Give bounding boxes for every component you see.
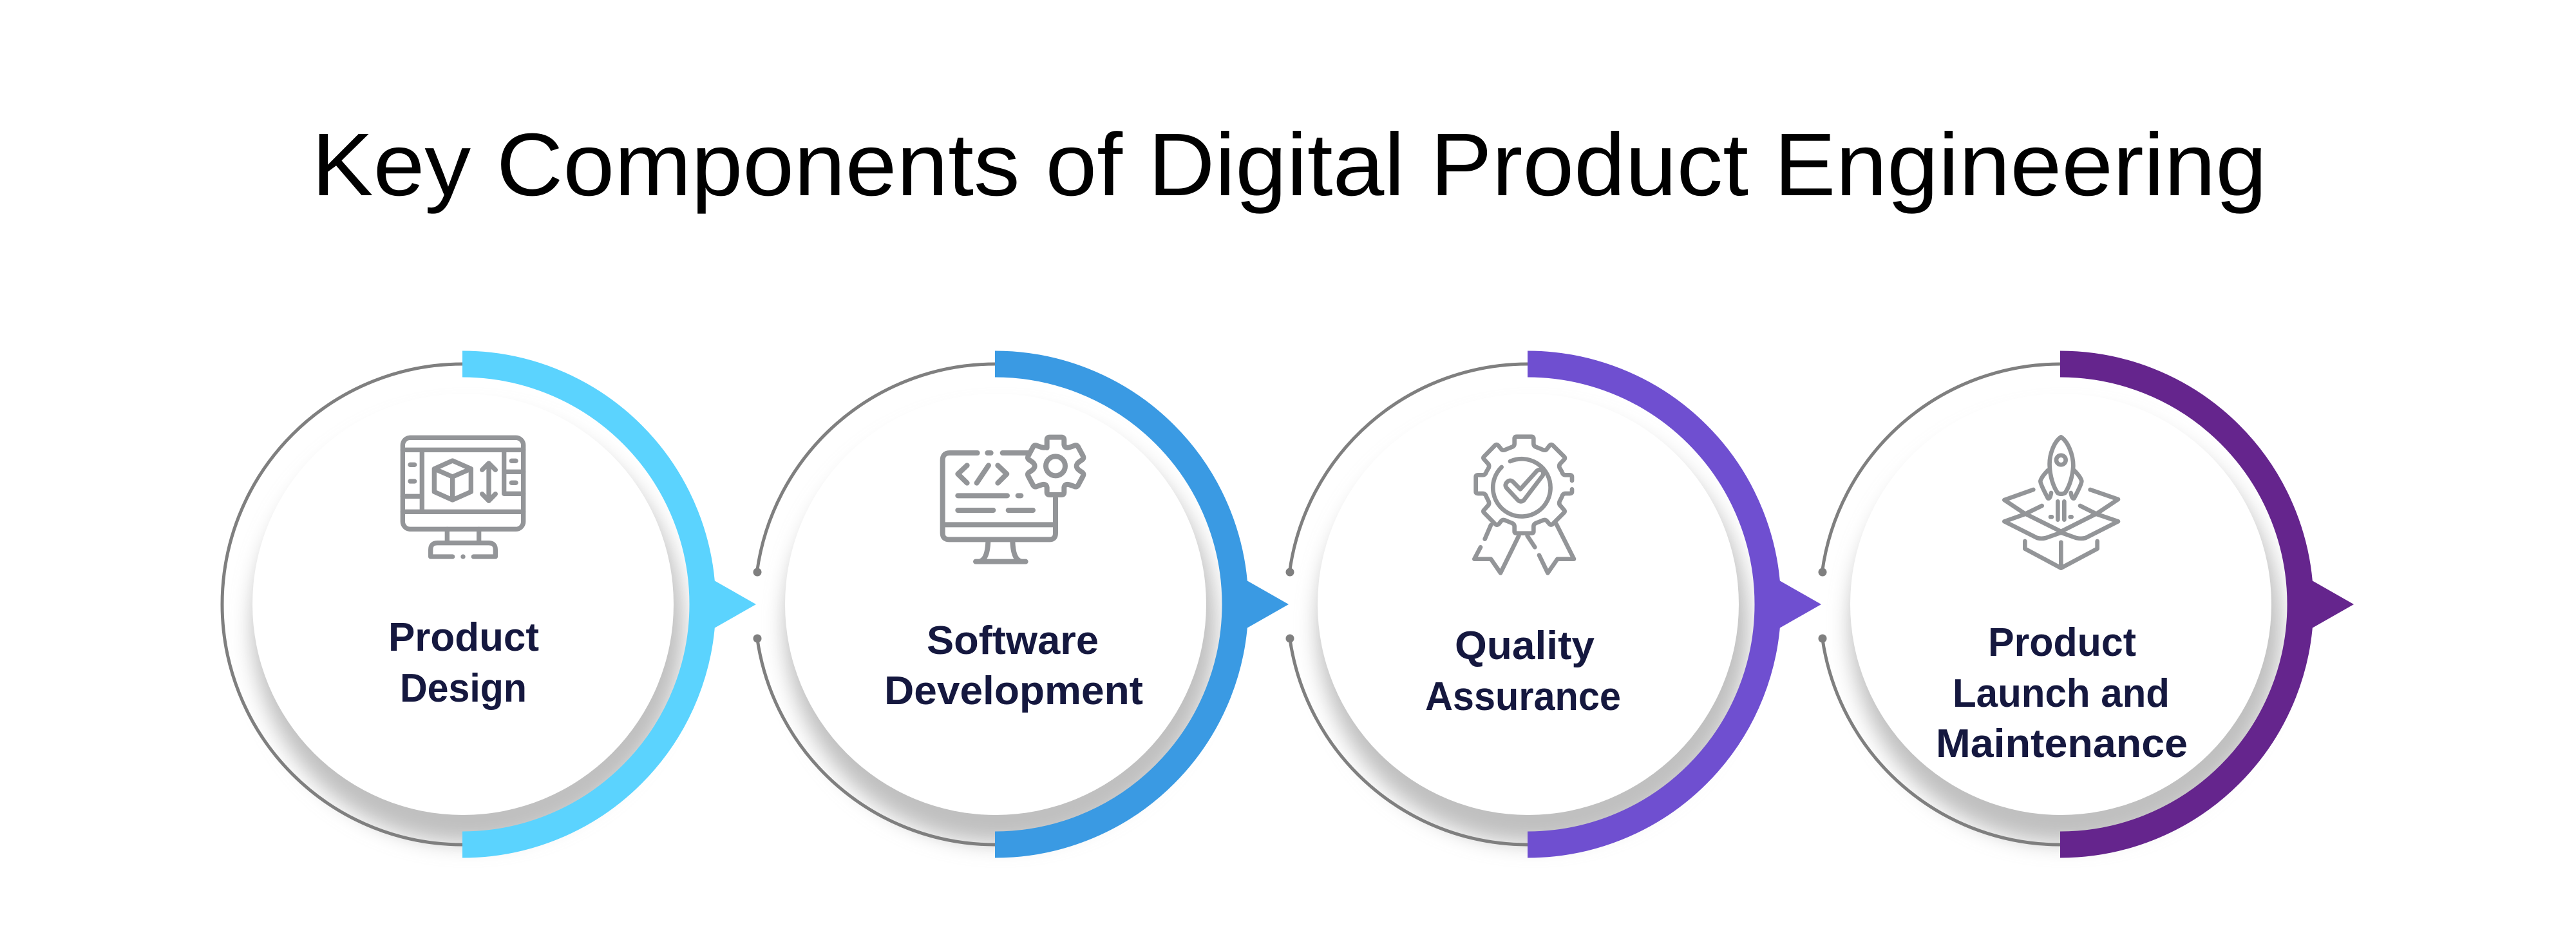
panel: product launch and maintenance	[1819, 364, 2354, 845]
panel: product design	[222, 364, 756, 845]
ring line with end dots	[753, 364, 995, 845]
title: Key Components of Digital Product Engineering	[312, 115, 2267, 215]
label: Assurance	[1425, 675, 1621, 719]
label	[884, 619, 1143, 713]
ring line	[222, 364, 462, 845]
icon: monitor with 3d cube	[402, 437, 524, 557]
label	[388, 615, 539, 711]
panel: quality assurance	[1285, 364, 1821, 845]
icon: rocket launching from box	[2004, 437, 2118, 568]
panel: software development	[753, 364, 1289, 845]
progress arc with arrow	[2060, 364, 2354, 845]
label: Development	[884, 669, 1143, 713]
label: Design	[400, 666, 527, 711]
icon: gear badge with check	[1474, 437, 1574, 573]
label: Launch and	[1953, 671, 2170, 716]
label: Product	[1988, 620, 2136, 665]
progress arc with arrow	[1528, 364, 1821, 845]
icon: monitor with code and gear	[943, 437, 1083, 562]
progress arc with arrow	[462, 364, 756, 845]
progress arc with arrow	[995, 364, 1289, 845]
label	[1425, 624, 1621, 719]
ring line with end dots	[1819, 364, 2060, 845]
label: Product	[388, 615, 539, 660]
label	[1936, 620, 2188, 766]
label: Quality	[1455, 624, 1595, 668]
ring line with end dots	[1285, 364, 1528, 845]
label: Maintenance	[1936, 722, 2188, 766]
label: Software	[927, 619, 1099, 663]
